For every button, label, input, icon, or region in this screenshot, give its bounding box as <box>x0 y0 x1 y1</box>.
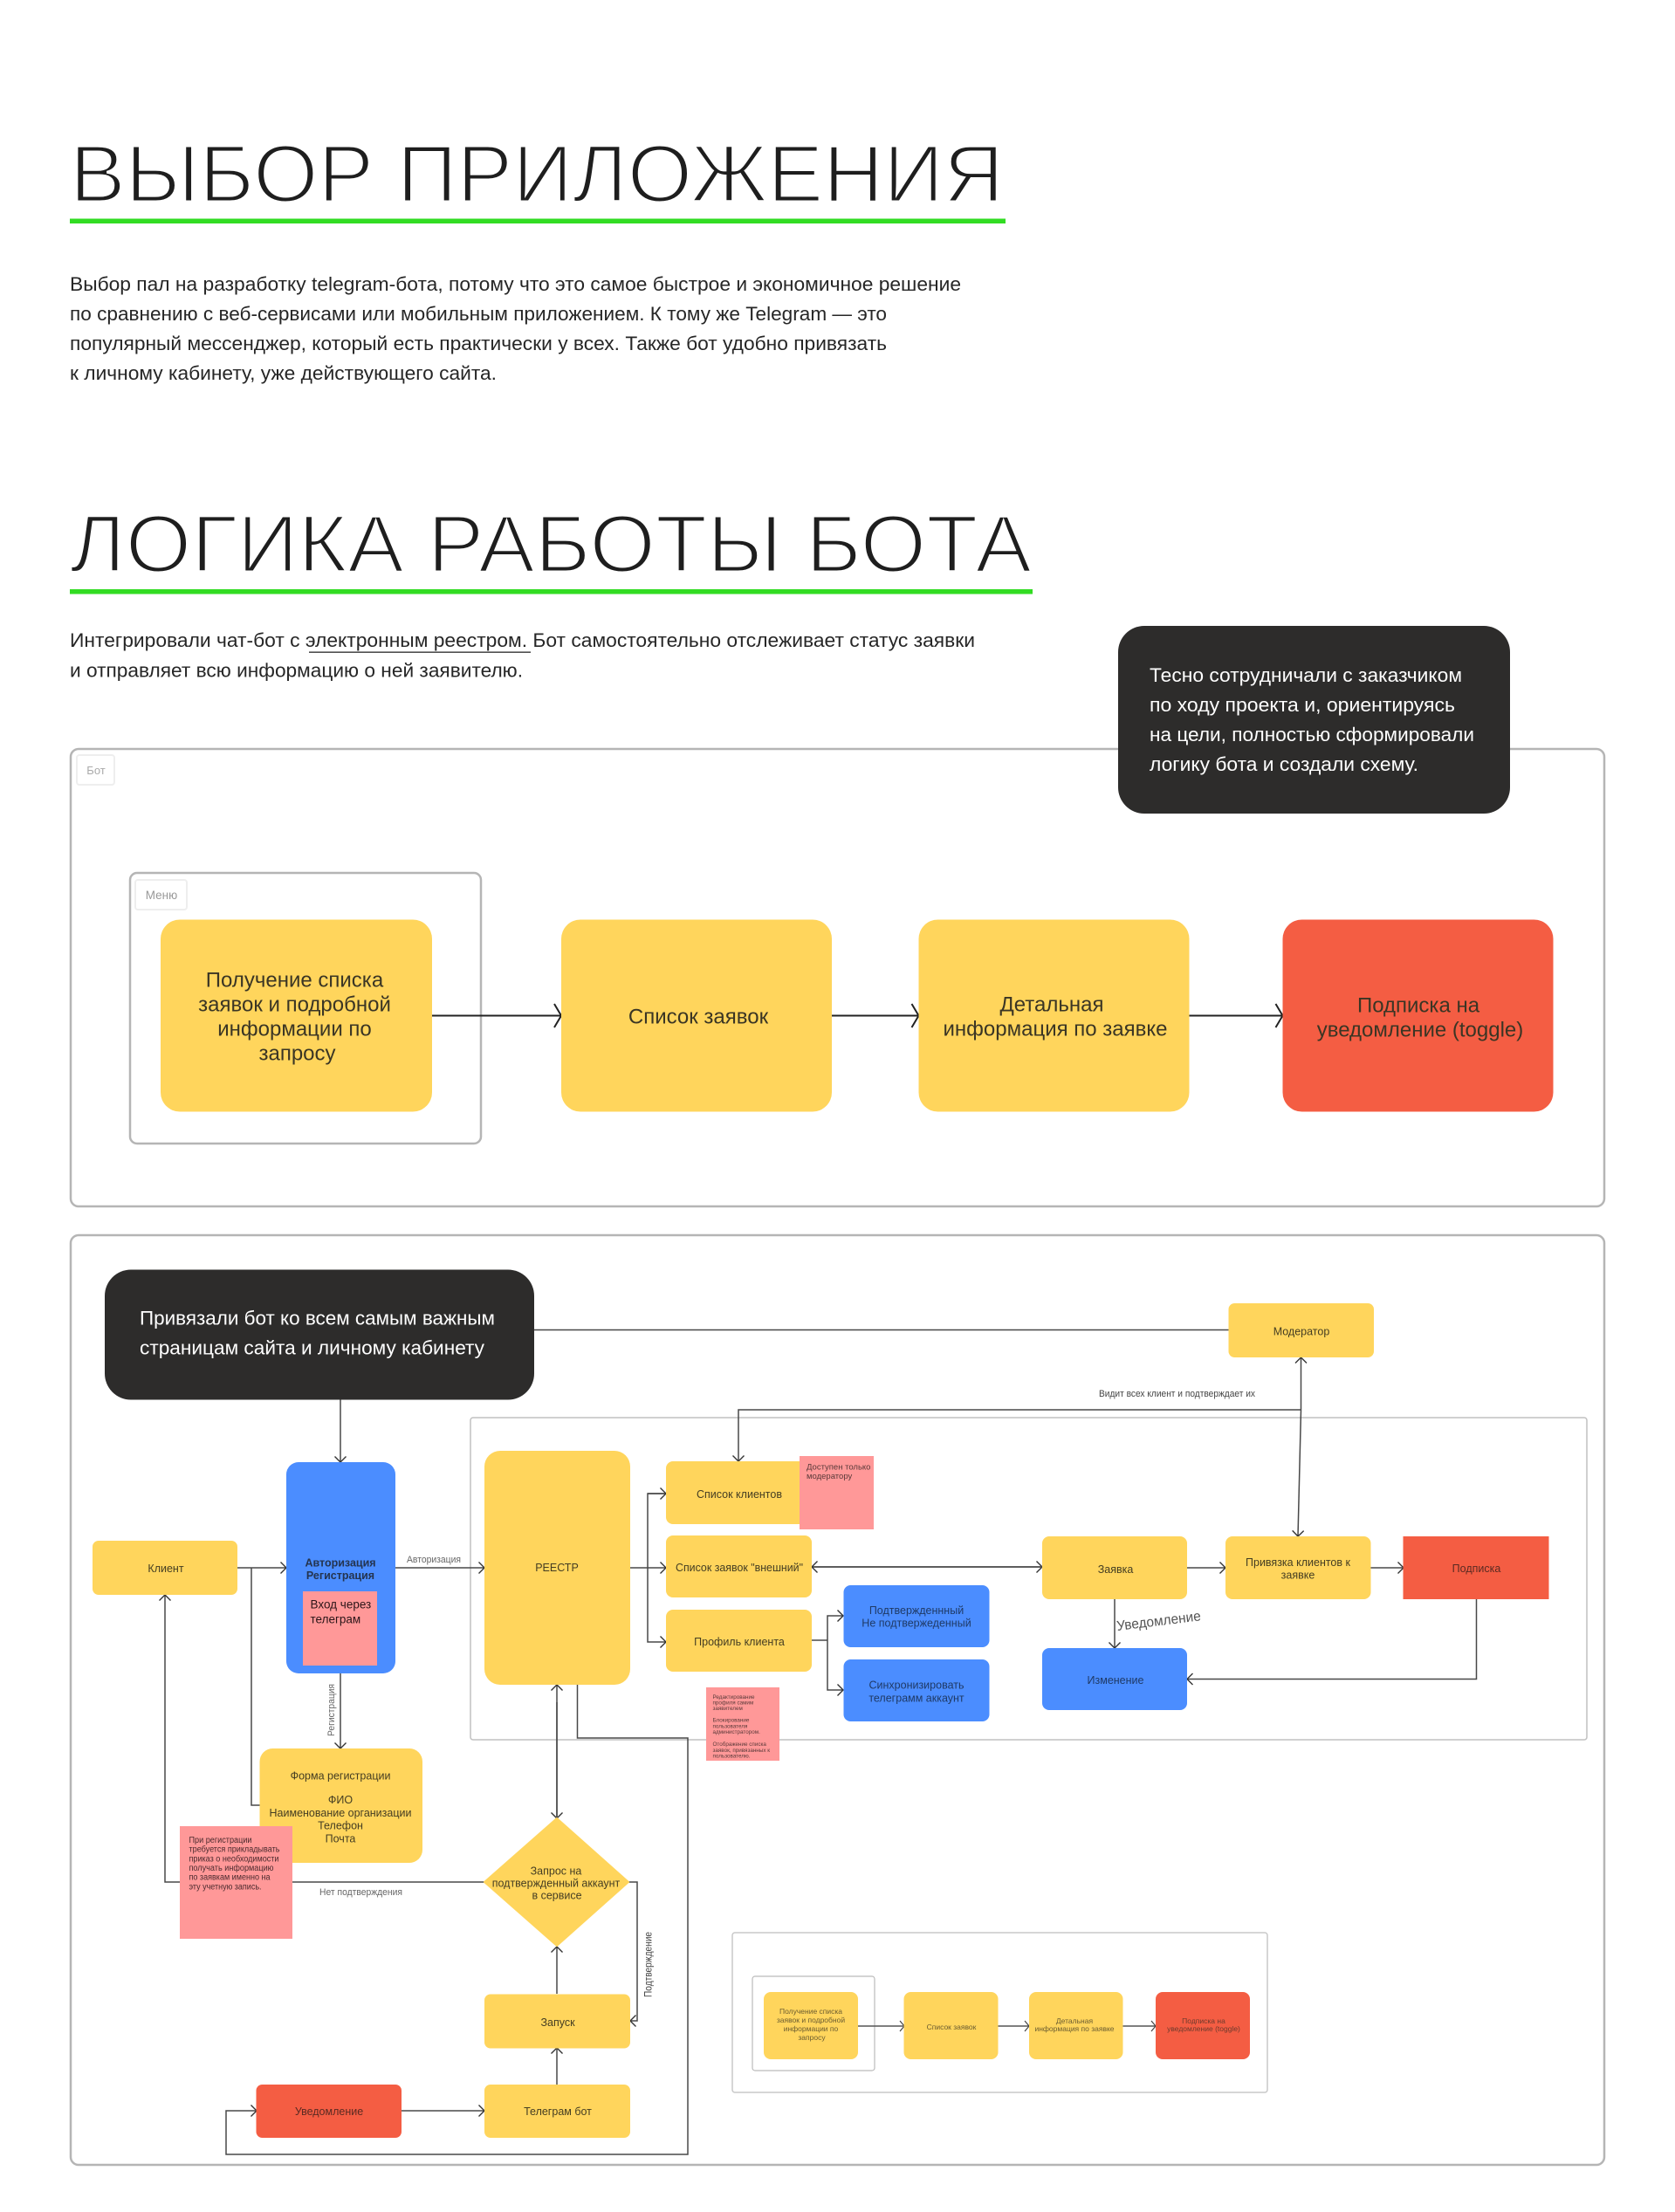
box: авторизация регистрация <box>286 1462 395 1673</box>
callout: сотрудничество с заказчиком: по ходу проекта и, ориентируясь <box>1150 694 1455 716</box>
box: получение списка: запросу <box>258 1042 336 1065</box>
text block: app choice rationale: Выбор пал на разработку telegram-бота, потому что это самое быстрое и экономичное решение <box>70 273 961 295</box>
box: подписка на уведомление: уведомление (toggle) <box>1317 1018 1523 1042</box>
box: реестр <box>484 1451 630 1685</box>
box: подписка <box>1404 1536 1548 1599</box>
panel: мини-меню <box>752 1976 875 2071</box>
arrow: diamond confirmation to launch <box>628 1882 637 2021</box>
heading: выбор приложения: ВЫБОР ПРИЛОЖЕНИЯ <box>70 128 1004 219</box>
diamond: запрос на подтвержденный аккаунт <box>484 1818 628 1946</box>
note: доступен только модератору: Доступен только <box>807 1463 870 1472</box>
mini box: получение списка: заявок и подробной <box>777 2016 845 2024</box>
box: уведомление: Уведомление <box>295 2106 363 2118</box>
note: редактирование профиля: Блокирование <box>712 1718 750 1723</box>
note: редактирование профиля: Отображение списка <box>712 1741 766 1748</box>
callout: сотрудничество с заказчиком: на цели, полностью сформировали <box>1150 724 1474 745</box>
box: подтвержденный <box>843 1585 990 1647</box>
tag: бот: Бот <box>86 764 106 777</box>
mini box: получение списка: запросу <box>798 2033 826 2042</box>
note: редактирование профиля: Редактирование <box>712 1694 755 1700</box>
box: список заявок внешний <box>666 1535 812 1597</box>
box: получение списка: Получение списка <box>206 969 384 992</box>
note: при регистрации: приказ о необходимости <box>189 1854 279 1865</box>
box: привязка клиентов к заявке: Привязка клиентов к <box>1246 1556 1351 1569</box>
arrow: notification to telegram bot <box>402 2110 484 2112</box>
callout: привязка бота к страницам <box>105 1269 534 1400</box>
text block: app choice rationale: по сравнению с веб-сервисами или мобильным приложением. К тому же Telegram — это <box>70 303 887 325</box>
box: подписка на уведомление: Подписка на <box>1357 993 1480 1018</box>
note: при регистрации: по заявкам именно на <box>189 1873 271 1882</box>
callout: сотрудничество с заказчиком <box>1118 626 1510 814</box>
mini box: получение списка <box>764 1992 858 2059</box>
mini arrow <box>858 2025 904 2027</box>
box: реестр: РЕЕСТР <box>535 1562 579 1574</box>
label: уведомление: Уведомление <box>1116 1609 1202 1634</box>
connector: registry to notification loop <box>226 1685 688 2154</box>
box: телеграм бот: Телеграм бот <box>524 2106 592 2118</box>
box: подписка: Подписка <box>1452 1563 1500 1575</box>
box: детальная информация <box>918 920 1189 1112</box>
arrow: application to change <box>1114 1599 1116 1648</box>
callout: привязка бота к страницам: Привязали бот ко всем самым важным <box>140 1308 495 1329</box>
note: при регистрации: эту учетную запись. <box>189 1882 262 1893</box>
box: получение списка: информации по <box>217 1018 372 1041</box>
mini box: детальная информация: информация по заявке <box>1034 2024 1115 2033</box>
arrow: moderator to client binding <box>1298 1410 1301 1536</box>
mini box: подписка: Подписка на <box>1182 2016 1225 2025</box>
mini arrow <box>1122 2025 1156 2027</box>
mini box: получение списка: информации по <box>784 2024 839 2033</box>
box: модератор: Модератор <box>1273 1325 1329 1337</box>
note: редактирование профиля <box>706 1687 779 1761</box>
label: видит всех клиент: Видит всех клиент и подтверждает их <box>1099 1389 1255 1399</box>
box: получение списка: заявок и подробной <box>198 993 391 1016</box>
box: клиент: Клиент <box>148 1563 184 1575</box>
note: редактирование профиля: пользователю. <box>712 1753 751 1760</box>
note: доступен только модератору <box>800 1456 874 1529</box>
box: список клиентов <box>666 1461 812 1524</box>
box: привязка клиентов к заявке <box>1225 1536 1370 1599</box>
mini box: список заявок: Список заявок <box>927 2023 977 2031</box>
mini box: подписка: уведомление (toggle) <box>1167 2024 1240 2033</box>
box: список заявок: Список заявок <box>628 1006 769 1028</box>
note: вход через телеграм: телеграм <box>311 1613 360 1625</box>
box: форма регистрации: Почта <box>326 1833 355 1845</box>
box: детальная информация: информация по заявке <box>943 1018 1168 1041</box>
connector: client to registration form <box>251 1568 260 1805</box>
box: список заявок внешний: Список заявок "внешний" <box>676 1562 803 1574</box>
box: подписка на уведомление <box>1283 920 1554 1112</box>
box: клиент <box>93 1541 237 1595</box>
panel: реестр <box>470 1418 1587 1740</box>
diamond: запрос на подтвержденный аккаунт: Запрос на <box>531 1865 581 1877</box>
connector: callout to moderator <box>534 1329 1229 1330</box>
panel: меню: Меню <box>146 889 177 902</box>
panel: схема бота <box>71 1235 1604 2165</box>
box: запуск <box>484 1994 630 2048</box>
arrow: application to binding <box>1187 1567 1225 1569</box>
mini box: получение списка: Получение списка <box>779 2007 842 2016</box>
box: форма регистрации: Наименование организации <box>270 1807 411 1819</box>
callout: сотрудничество с заказчиком: Тесно сотрудничали с заказчиком <box>1150 664 1462 686</box>
mini box: детальная информация <box>1029 1992 1122 2059</box>
arrow: telegram bot to launch <box>556 2048 558 2085</box>
label: авторизация: Авторизация <box>407 1555 461 1565</box>
box: получение списка <box>161 920 432 1112</box>
box: заявка: Заявка <box>1098 1563 1133 1576</box>
text block: registry integration: и отправляет всю информацию о ней заявителю. <box>70 660 523 681</box>
diamond: запрос на подтвержденный аккаунт: в сервисе <box>532 1889 582 1901</box>
box: форма регистрации <box>260 1748 422 1863</box>
box: подтвержденный: Подтвержденнный <box>869 1604 964 1617</box>
note: при регистрации <box>180 1826 292 1939</box>
note: редактирование профиля: заявителем <box>712 1706 743 1712</box>
note: вход через телеграм <box>303 1591 377 1666</box>
arrow: callout to authorization <box>340 1398 341 1462</box>
mini box: детальная информация: Детальная <box>1056 2016 1093 2025</box>
arrow: authorization to registration form <box>340 1673 341 1748</box>
box: модератор <box>1229 1303 1374 1357</box>
box: изменение: Изменение <box>1088 1674 1144 1686</box>
box: форма регистрации: Форма регистрации <box>291 1770 390 1783</box>
note: доступен только модератору: модератору <box>807 1472 852 1481</box>
callout: привязка бота к страницам: страницам сайта и личному кабинету <box>140 1337 485 1358</box>
arrow <box>432 1014 561 1016</box>
note: редактирование профиля: профиля самим <box>712 1700 753 1706</box>
box: уведомление <box>257 2085 402 2138</box>
box: синхронизировать <box>843 1659 990 1721</box>
note: редактирование профиля: пользователя <box>712 1723 747 1730</box>
note: при регистрации: получать информацию <box>189 1864 274 1873</box>
arrow: no confirmation to client <box>165 1595 484 1882</box>
arrow: up to registry <box>556 1685 558 1818</box>
arrow: binding to subscription <box>1370 1567 1404 1569</box>
callout: сотрудничество с заказчиком: логику бота и создали схему. <box>1150 753 1418 775</box>
heading: логика работы бота: ЛОГИКА РАБОТЫ БОТА <box>70 498 1032 589</box>
panel: мини-схема <box>732 1933 1267 2092</box>
box: подтвержденный: Не подтвержеденный <box>862 1617 971 1629</box>
arrow: launch to diamond <box>556 1947 558 1994</box>
box: форма регистрации: Телефон <box>318 1819 363 1831</box>
box: изменение <box>1042 1648 1187 1710</box>
text block: app choice rationale: к личному кабинету, уже действующего сайта. <box>70 362 497 384</box>
box: список клиентов: Список клиентов <box>697 1488 782 1501</box>
box: авторизация регистрация: Регистрация <box>306 1570 374 1582</box>
box: запуск: Запуск <box>540 2016 575 2029</box>
arrow <box>832 1014 918 1016</box>
note: вход через телеграм: Вход через <box>311 1597 371 1611</box>
box: заявка <box>1042 1536 1187 1599</box>
box: синхронизировать: Синхронизировать <box>869 1680 964 1692</box>
arrow: application list to application <box>812 1566 1042 1568</box>
tag: бот <box>77 755 114 785</box>
arrow: profile branches <box>812 1616 843 1690</box>
note: при регистрации: требуется прикладывать <box>189 1845 279 1854</box>
label: нет подтверждения: Нет подтверждения <box>319 1887 402 1898</box>
arrow <box>1189 1014 1283 1016</box>
box: профиль клиента: Профиль клиента <box>694 1636 785 1648</box>
arrow: registry and diamond <box>556 1702 558 1818</box>
box: телеграм бот <box>484 2085 630 2138</box>
label: подтверждение: Подтверждение <box>642 1932 655 1997</box>
note: при регистрации: При регистрации <box>189 1836 251 1845</box>
arrow: authorization to registry <box>395 1567 484 1569</box>
arrow: subscription to change <box>1187 1599 1477 1680</box>
box: синхронизировать: телеграмм аккаунт <box>868 1692 964 1704</box>
text block: registry integration <box>70 629 980 681</box>
arrow: registry branches <box>630 1494 666 1642</box>
panel: бот <box>71 749 1604 1206</box>
note: редактирование профиля: администратором. <box>712 1729 760 1735</box>
label: регистрация: Регистрация <box>326 1684 337 1736</box>
box: привязка клиентов к заявке: заявке <box>1281 1570 1315 1582</box>
box: профиль клиента <box>666 1610 812 1672</box>
arrow: client to authorization <box>237 1567 286 1569</box>
box: форма регистрации: ФИО <box>328 1794 353 1806</box>
note: редактирование профиля: заявок, привязанных к <box>712 1748 770 1754</box>
arrow: up to moderator <box>1301 1357 1302 1410</box>
box: список заявок <box>561 920 832 1112</box>
mini box: подписка <box>1156 1992 1250 2059</box>
mini arrow <box>998 2025 1029 2027</box>
arrow: moderator to client list <box>738 1410 1301 1461</box>
panel: меню <box>130 873 481 1144</box>
text block: app choice rationale: популярный мессенджер, который есть практически у всех. Также бот удобно привязать <box>70 333 887 354</box>
diamond: запрос на подтвержденный аккаунт: подтвержденный аккаунт <box>492 1877 621 1889</box>
text block: registry integration: Интегрировали чат-бот с электронным реестром. Бот самостоятельно отслеживает статус заявки <box>70 629 975 651</box>
box: авторизация регистрация: Авторизация <box>305 1557 376 1570</box>
box: детальная информация: Детальная <box>1000 993 1103 1016</box>
mini box: список заявок <box>904 1992 999 2059</box>
